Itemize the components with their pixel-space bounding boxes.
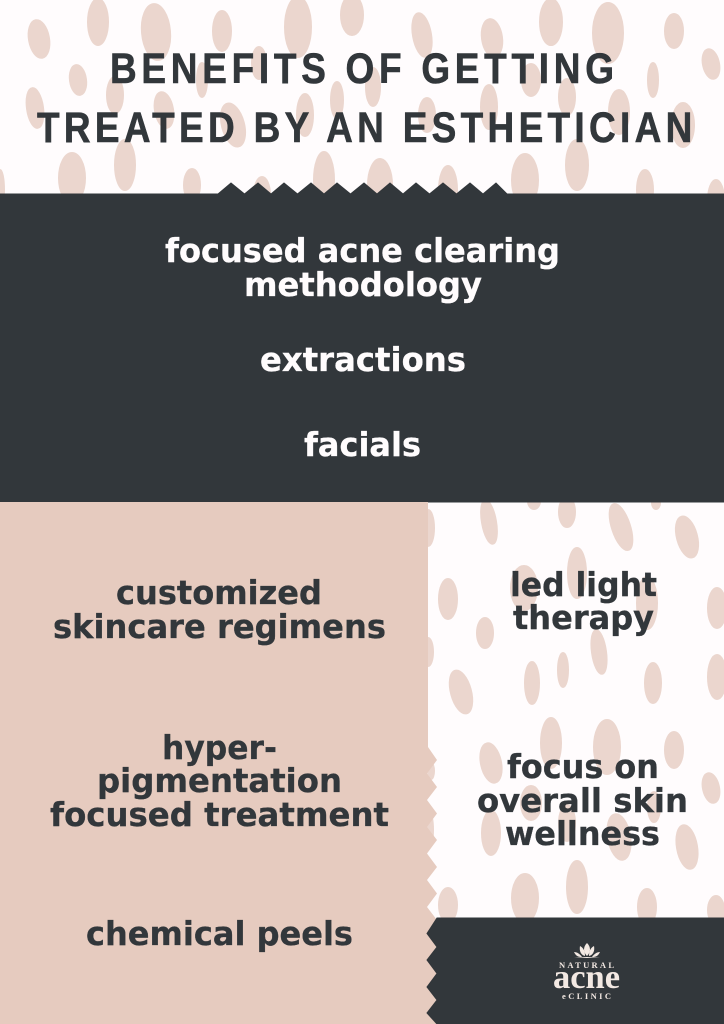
benefit text: chemical peels: chemical peels [86,914,353,953]
benefit text: led light therapy [510,565,657,637]
logo: Natural Acne eClinic [553,943,620,1001]
spotted background: top [0,0,724,220]
benefit text: facials: facials [304,425,421,464]
benefit text: hyper-pigmentation focused treatment: hyper- [162,728,277,767]
benefit text: focused acne clearing methodology: focused acne clearing [165,231,560,270]
title [37,45,692,152]
dark panel: logo footer [427,918,724,1024]
benefit text: focused acne clearing methodology [165,231,560,304]
logo: Natural Acne eClinic: acne [553,959,620,996]
benefit text: customized skincare regimens: skincare regimens [53,607,386,646]
benefit text: led light therapy: led light [510,565,657,604]
pink panel: left benefits [0,502,437,1024]
benefit text: hyper-pigmentation focused treatment [50,728,389,834]
benefit text: customized skincare regimens: customized [116,573,322,612]
dark panel: top benefits [0,183,724,502]
benefit text: focus on overall skin wellness: overall skin [477,781,688,820]
benefit text: focus on overall skin wellness [477,747,688,853]
logo: Natural Acne eClinic: NATURAL [559,960,614,970]
benefit text: hyper-pigmentation focused treatment: focused treatment [50,795,389,834]
benefit text: customized skincare regimens [53,573,386,646]
logo: Natural Acne eClinic: eCLINIC [562,991,611,1001]
benefit text: focus on overall skin wellness: focus on [507,747,659,786]
spotted background: right column [422,493,724,925]
title: TREATED BY AN ESTHETICIAN [37,104,692,152]
icon: lotus [574,943,600,958]
benefit text: hyper-pigmentation focused treatment: pigmentation [97,761,342,800]
benefit text: focused acne clearing methodology: methodology [244,265,482,304]
benefit text: extractions: extractions [260,340,466,379]
benefit text: focus on overall skin wellness: wellness [505,814,660,853]
benefit text: led light therapy: therapy [513,598,654,637]
title: BENEFITS OF GETTING [110,45,614,93]
